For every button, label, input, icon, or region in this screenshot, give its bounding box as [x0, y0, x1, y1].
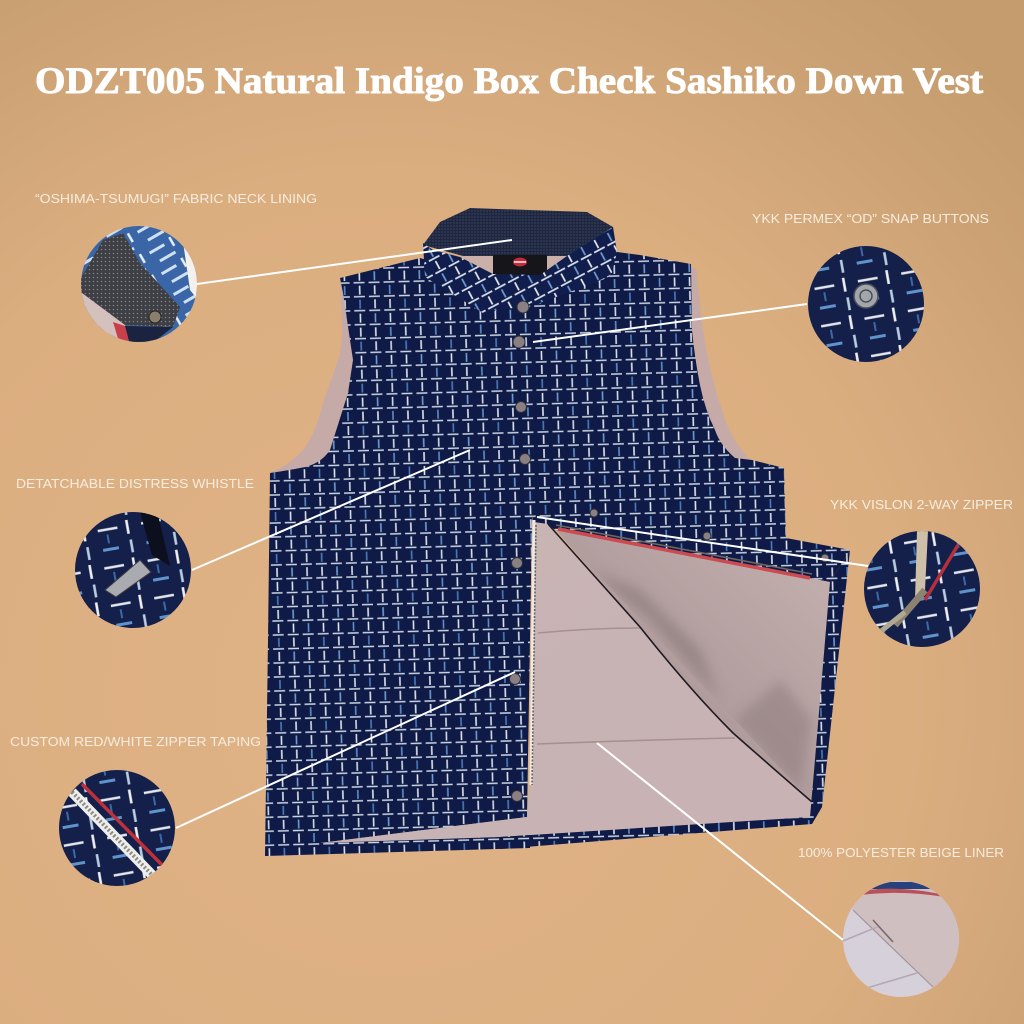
- right armhole lining: [690, 268, 752, 462]
- callout: snap buttons: [533, 211, 989, 362]
- flap shading: [602, 576, 813, 784]
- left armhole lining: [270, 280, 353, 473]
- title: ODZT005 Natural Indigo Box Check Sashiko Down Vest: [35, 61, 984, 102]
- callout: neck lining: [35, 191, 512, 345]
- neck label: [493, 255, 547, 281]
- detail photo: [75, 512, 191, 628]
- flap and hem binding: [500, 550, 850, 849]
- leader line: [176, 672, 515, 828]
- leader line: [537, 517, 868, 566]
- turned-back flap liner: [556, 530, 830, 802]
- collar front band: [423, 227, 617, 313]
- vest body left front: [265, 258, 532, 856]
- inner neck pale lining: [460, 256, 567, 274]
- liner quilting seams: [537, 628, 735, 744]
- detail photo: [78, 226, 198, 345]
- detail photo: [808, 246, 924, 362]
- label: 100% POLYESTER BEIGE LINER: [798, 845, 1004, 860]
- snap buttons: [510, 301, 829, 802]
- label: DETATCHABLE DISTRESS WHISTLE: [16, 476, 254, 491]
- fold line: [548, 524, 812, 802]
- zipper teeth on flap: [556, 525, 812, 574]
- callout: zipper taping: [10, 672, 515, 886]
- detail photo: [843, 881, 959, 997]
- label: YKK PERMEX “OD” SNAP BUTTONS: [752, 211, 989, 226]
- leader line: [192, 450, 470, 570]
- label: CUSTOM RED/WHITE ZIPPER TAPING: [10, 734, 261, 749]
- callout: distress whistle: [16, 450, 470, 628]
- callout: 2-way zipper: [537, 497, 1013, 647]
- detail photo: [864, 531, 980, 647]
- vest liner: [320, 522, 812, 843]
- collar neck lining: [423, 208, 615, 256]
- label: “OSHIMA-TSUMUGI” FABRIC NECK LINING: [35, 191, 317, 206]
- red zipper tape: [558, 529, 810, 578]
- vest photo: [265, 208, 850, 856]
- label: YKK VISLON 2-WAY ZIPPER: [830, 497, 1013, 512]
- detail photo: [59, 770, 175, 886]
- white zipper: [531, 520, 536, 785]
- callout: beige liner: [597, 743, 1004, 997]
- leader line: [533, 304, 807, 342]
- leader line: [197, 240, 512, 284]
- vest body right front upper: [525, 252, 850, 582]
- leader line: [597, 743, 843, 940]
